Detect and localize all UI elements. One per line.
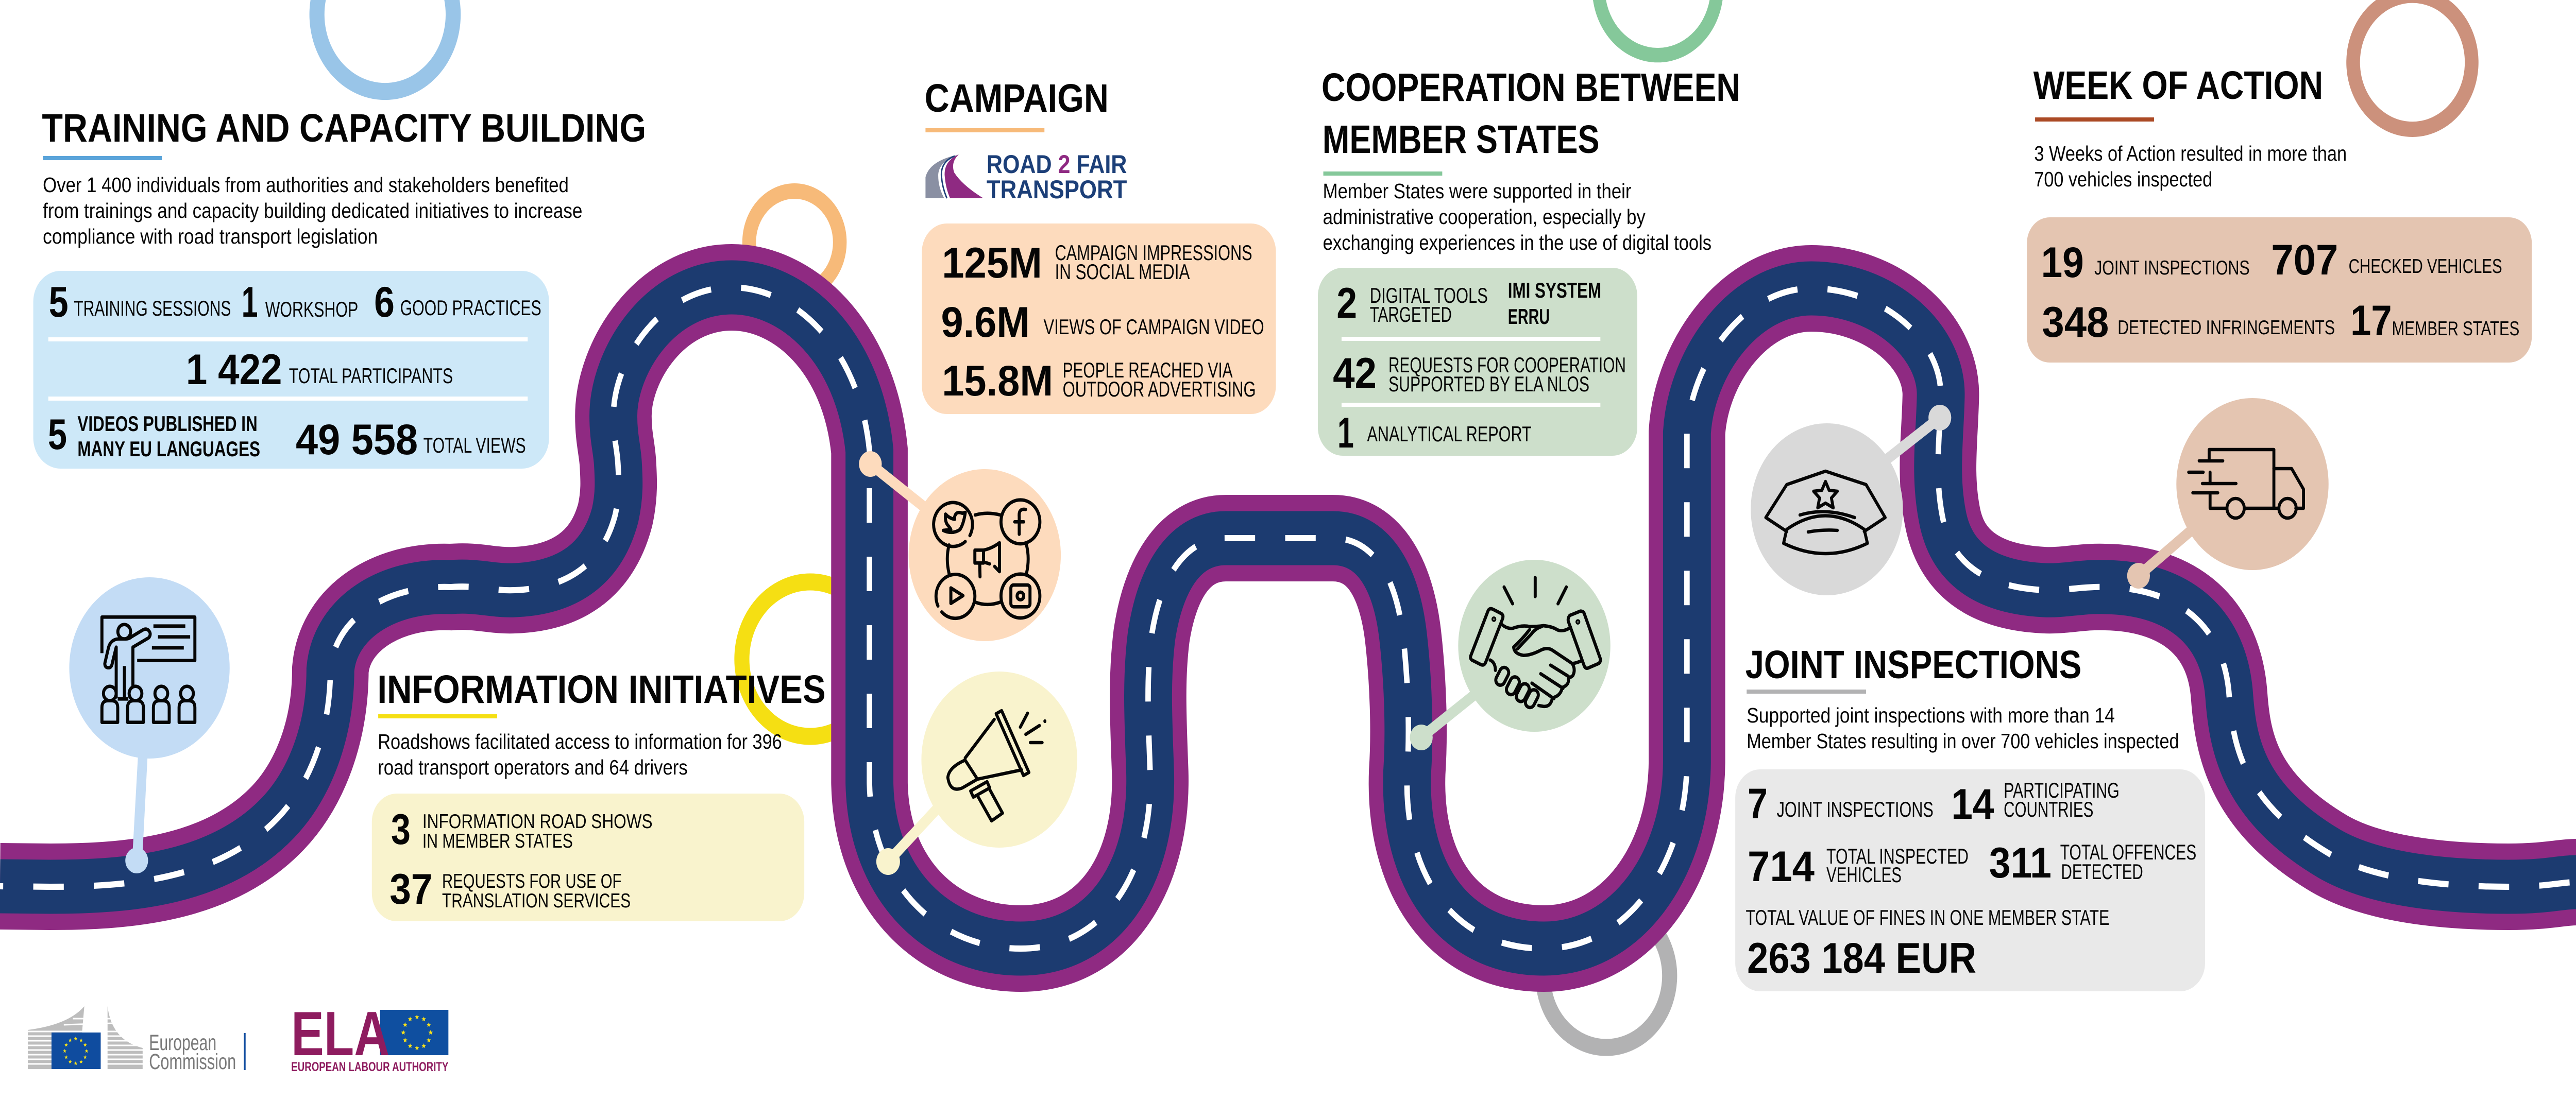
stats box: information: [372, 794, 804, 921]
underline: joint inspections: [1747, 690, 1866, 694]
logo: European Labour Authority: [291, 999, 449, 1074]
panel: campaign: [922, 76, 1276, 414]
description: week of action: [2034, 142, 2347, 192]
description: training: from trainings and capacity building dedicated initiatives to increase: [43, 199, 582, 223]
underline: training: [43, 156, 162, 160]
stats box: week of action: JOINT INSPECTIONS: [2094, 256, 2250, 279]
stats box: training: 1 422: [186, 345, 282, 393]
stats box: joint inspections: 14: [1951, 780, 1994, 828]
stats box: information: 3: [391, 805, 411, 853]
underline: campaign: [925, 128, 1044, 132]
ring: cooperation green: [1593, 0, 1723, 62]
stats box: training: 5: [48, 410, 67, 458]
stats box: cooperation: TARGETED: [1370, 303, 1452, 327]
winding road: [0, 287, 2576, 949]
description: joint inspections: Member States resulting in over 700 vehicles inspected: [1747, 730, 2179, 753]
stats box: campaign: CAMPAIGN IMPRESSIONS: [1055, 241, 1252, 265]
stats box: joint inspections: [1735, 769, 2205, 991]
ring: campaign orange: [749, 191, 840, 294]
stats box: joint inspections: 7: [1748, 779, 1768, 828]
stats box: week of action: 348: [2042, 298, 2109, 346]
stats box: information: IN MEMBER STATES: [422, 830, 573, 852]
logo: road 2 fair transport: ROAD 2 FAIR: [987, 150, 1127, 179]
stats box: joint inspections: DETECTED: [2061, 860, 2143, 884]
stats box: week of action: 17: [2350, 296, 2392, 345]
panel: training and capacity building: [33, 106, 646, 469]
logo: European Labour Authority: EUROPEAN LABOUR AUTHORITY: [291, 1060, 449, 1074]
stats box: training: TOTAL PARTICIPANTS: [289, 364, 453, 388]
stats box: week of action: 19: [2041, 238, 2084, 286]
stats box: campaign: 9.6M: [941, 298, 1030, 346]
stats box: information: TRANSLATION SERVICES: [442, 889, 631, 911]
stats box: information: 37: [389, 865, 432, 913]
stats box: training: TRAINING SESSIONS: [74, 297, 231, 321]
logo: European Commission: European: [149, 1030, 216, 1055]
stats box: campaign: PEOPLE REACHED VIA: [1063, 358, 1233, 383]
stats box: week of action: MEMBER STATES: [2392, 317, 2519, 339]
stats box: training: MANY EU LANGUAGES: [77, 437, 260, 461]
stats box: joint inspections: 311: [1989, 838, 2052, 887]
description: information: road transport operators and 64 drivers: [378, 756, 688, 780]
stats box: cooperation: SUPPORTED BY ELA NLOS: [1388, 372, 1589, 397]
description: information: [378, 730, 782, 780]
description: cooperation: Member States were supported in their: [1323, 180, 1632, 203]
ring: week of action brown: [2346, 0, 2479, 137]
heading: joint inspections: JOINT INSPECTIONS: [1745, 643, 2081, 687]
description: training: [43, 174, 582, 249]
logo: European Commission: [25, 1006, 246, 1074]
underline: week of action: [2035, 117, 2154, 122]
panel: joint inspections: [1735, 643, 2205, 991]
panel: cooperation between member states: [1318, 65, 1740, 457]
stats box: joint inspections: JOINT INSPECTIONS: [1777, 798, 1934, 822]
stats box: cooperation: [1318, 268, 1637, 457]
stats box: training: 6: [374, 278, 395, 326]
stats box: cooperation: 1: [1337, 408, 1354, 457]
icon marker: social media: [859, 451, 1061, 641]
stats box: training: TOTAL VIEWS: [423, 434, 526, 458]
stats box: joint inspections: 714: [1748, 842, 1815, 890]
description: joint inspections: Supported joint inspections with more than 14: [1747, 704, 2115, 728]
stats box: joint inspections: TOTAL OFFENCES: [2060, 840, 2196, 865]
stats box: campaign: 125M: [942, 238, 1042, 287]
heading: campaign: CAMPAIGN: [925, 76, 1109, 121]
heading: cooperation: MEMBER STATES: [1323, 117, 1600, 162]
heading: training: TRAINING AND CAPACITY BUILDING: [42, 106, 646, 150]
stats box: campaign: IN SOCIAL MEDIA: [1055, 260, 1190, 284]
icon marker: handshake: [1410, 560, 1611, 750]
ring: information yellow: [742, 582, 878, 736]
stats box: training: WORKSHOP: [265, 298, 358, 322]
stats box: week of action: CHECKED VEHICLES: [2349, 255, 2502, 277]
stats box: training: GOOD PRACTICES: [400, 296, 541, 320]
stats box: cooperation: IMI SYSTEM: [1508, 279, 1601, 303]
icon marker: police hat: [1751, 405, 1951, 595]
logo: road 2 fair transport: TRANSPORT: [987, 176, 1127, 204]
icon marker: megaphone: [876, 672, 1077, 875]
description: training: Over 1 400 individuals from authorities and stakeholders benefited: [43, 174, 569, 197]
description: cooperation: [1323, 180, 1711, 255]
stats box: training: VIDEOS PUBLISHED IN: [77, 412, 258, 436]
description: week of action: 3 Weeks of Action resulted in more than: [2034, 142, 2347, 166]
logo: road 2 fair transport: [925, 150, 1127, 204]
stats box: cooperation: ANALYTICAL REPORT: [1367, 422, 1532, 446]
heading: cooperation: COOPERATION BETWEEN: [1321, 65, 1740, 110]
ring: joint inspections grey: [1543, 904, 1670, 1047]
stats box: cooperation: 42: [1333, 349, 1377, 397]
description: cooperation: administrative cooperation, especially by: [1323, 205, 1646, 229]
stats box: training: 5: [49, 278, 69, 326]
heading: week of action: WEEK OF ACTION: [2033, 63, 2323, 108]
stats box: cooperation: DIGITAL TOOLS: [1370, 284, 1488, 308]
stats box: campaign: OUTDOOR ADVERTISING: [1063, 377, 1256, 402]
heading: information: INFORMATION INITIATIVES: [377, 667, 826, 712]
stats box: cooperation: ERRU: [1508, 305, 1550, 329]
stats box: campaign: [922, 223, 1276, 414]
heading: cooperation: [1321, 65, 1740, 162]
stats box: information: REQUESTS FOR USE OF: [442, 870, 621, 892]
stats box: joint inspections: VEHICLES: [1826, 863, 1902, 887]
stats box: campaign: 15.8M: [942, 356, 1053, 405]
stats box: cooperation: 2: [1336, 279, 1357, 327]
description: joint inspections: [1747, 704, 2179, 753]
stats box: joint inspections: COUNTRIES: [2004, 798, 2093, 822]
logo: European Labour Authority: ELA: [291, 999, 389, 1069]
stats box: joint inspections: TOTAL INSPECTED: [1826, 845, 1969, 869]
stats box: joint inspections: TOTAL VALUE OF FINES IN ONE MEMBER STATE: [1745, 906, 2109, 930]
stats box: week of action: 707: [2271, 235, 2338, 284]
stats box: cooperation: REQUESTS FOR COOPERATION: [1388, 353, 1626, 377]
stats box: campaign: VIEWS OF CAMPAIGN VIDEO: [1043, 315, 1264, 339]
description: training: compliance with road transport legislation: [43, 225, 378, 249]
stats box: week of action: DETECTED INFRINGEMENTS: [2117, 316, 2335, 338]
description: cooperation: exchanging experiences in the use of digital tools: [1323, 231, 1711, 255]
stats box: training: 1: [242, 278, 258, 326]
description: information: Roadshows facilitated access to information for 396: [378, 730, 782, 754]
panel: information initiatives: [372, 667, 826, 921]
icon marker: truck: [2127, 398, 2329, 589]
logo: European Commission: Commission: [149, 1049, 236, 1074]
underline: information: [378, 714, 497, 718]
stats box: joint inspections: PARTICIPATING: [2004, 779, 2120, 803]
stats box: training: 49 558: [296, 415, 418, 463]
stats box: information: INFORMATION ROAD SHOWS: [422, 810, 653, 832]
icon marker: teacher: [69, 577, 230, 873]
panel: week of action: [2027, 63, 2532, 363]
stats box: training: [33, 271, 549, 469]
stats box: week of action: [2027, 217, 2532, 363]
underline: cooperation: [1324, 171, 1442, 176]
description: week of action: 700 vehicles inspected: [2034, 168, 2212, 192]
ring: training blue: [310, 0, 461, 100]
stats box: joint inspections: 263 184 EUR: [1747, 934, 1976, 982]
